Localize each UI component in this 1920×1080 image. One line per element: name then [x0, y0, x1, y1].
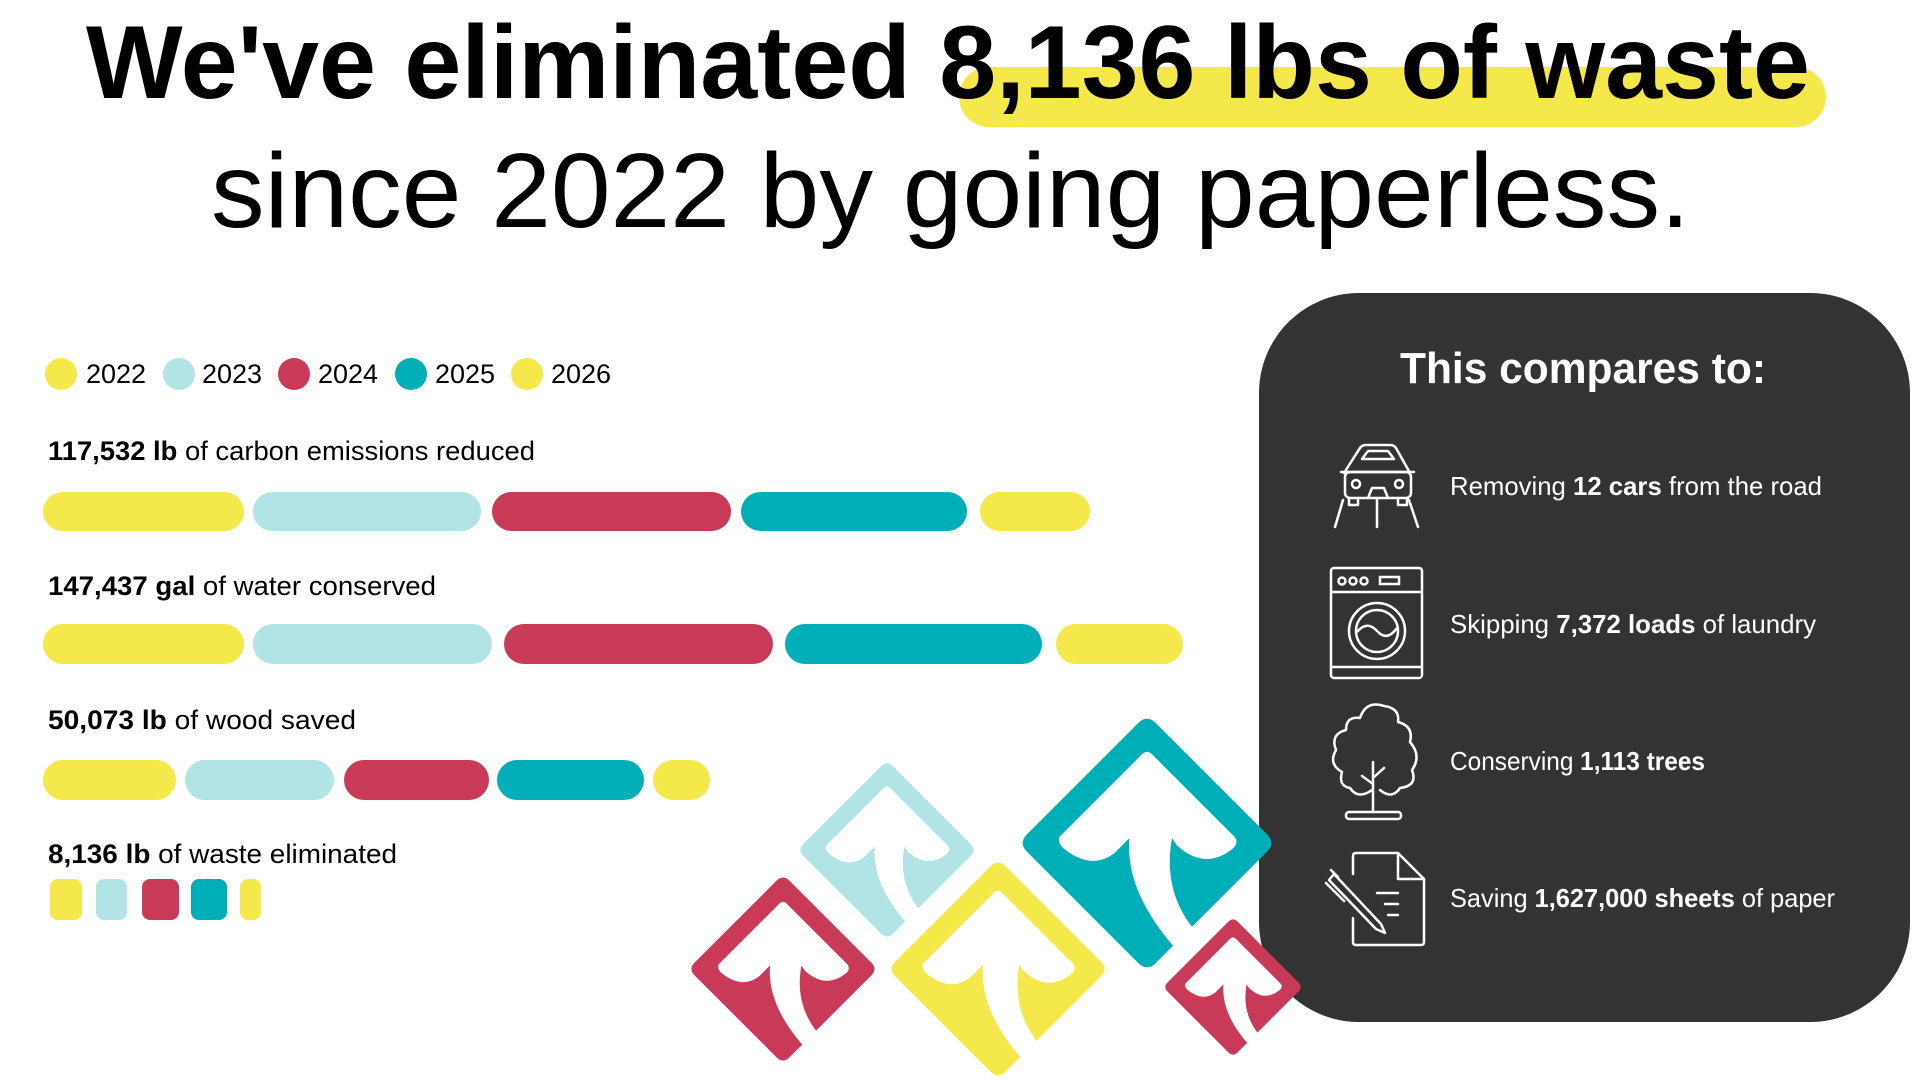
- legend: 2022: [86, 359, 146, 389]
- legend: 2025: [435, 359, 495, 389]
- legend: 2023: [202, 359, 262, 389]
- icon: paper and pen: [1326, 853, 1424, 945]
- row: carbon: [43, 436, 1090, 531]
- icon: washing machine: [1331, 568, 1422, 678]
- row: waste: [48, 839, 397, 920]
- arrow logo: red left: [691, 877, 875, 1061]
- legend: 2024: [318, 359, 378, 389]
- label: water: 147,437 gal of water conserved: [48, 571, 436, 601]
- bars: waste: [50, 879, 261, 920]
- bars: wood: [43, 760, 710, 800]
- panel: comparisons: [1259, 293, 1910, 1022]
- label: waste: 8,136 lb of waste eliminated: [48, 839, 397, 869]
- arrow logo: yellow: [892, 863, 1104, 1075]
- label: carbon: 117,532 lb of carbon emissions reduced: [48, 436, 535, 466]
- panel heading: This compares to:: [1400, 344, 1766, 393]
- label: wood: 50,073 lb of wood saved: [48, 705, 356, 735]
- bars: carbon: [43, 492, 1090, 531]
- icon: car: [1335, 445, 1418, 527]
- bars: water: [43, 624, 1183, 664]
- row: water: [43, 571, 1183, 664]
- text: laundry: Skipping 7,372 loads of laundry: [1450, 609, 1816, 639]
- title highlight: [959, 67, 1826, 127]
- title line 1: We've eliminated 8,136 lbs of waste: [86, 5, 1810, 121]
- text: cars: Removing 12 cars from the road: [1450, 471, 1822, 501]
- arrow logo: red right: [1165, 919, 1301, 1055]
- title line 2: since 2022 by going paperless.: [211, 132, 1690, 250]
- text: paper: Saving 1,627,000 sheets of paper: [1450, 883, 1835, 913]
- title: [86, 5, 1826, 250]
- icon: tree: [1333, 704, 1417, 819]
- row: wood: [43, 705, 710, 800]
- arrow logo: light blue: [800, 763, 974, 937]
- legend: [45, 358, 611, 390]
- legend: 2026: [551, 359, 611, 389]
- text: trees: Conserving 1,113 trees: [1450, 746, 1705, 776]
- arrow logo: teal: [1023, 719, 1271, 967]
